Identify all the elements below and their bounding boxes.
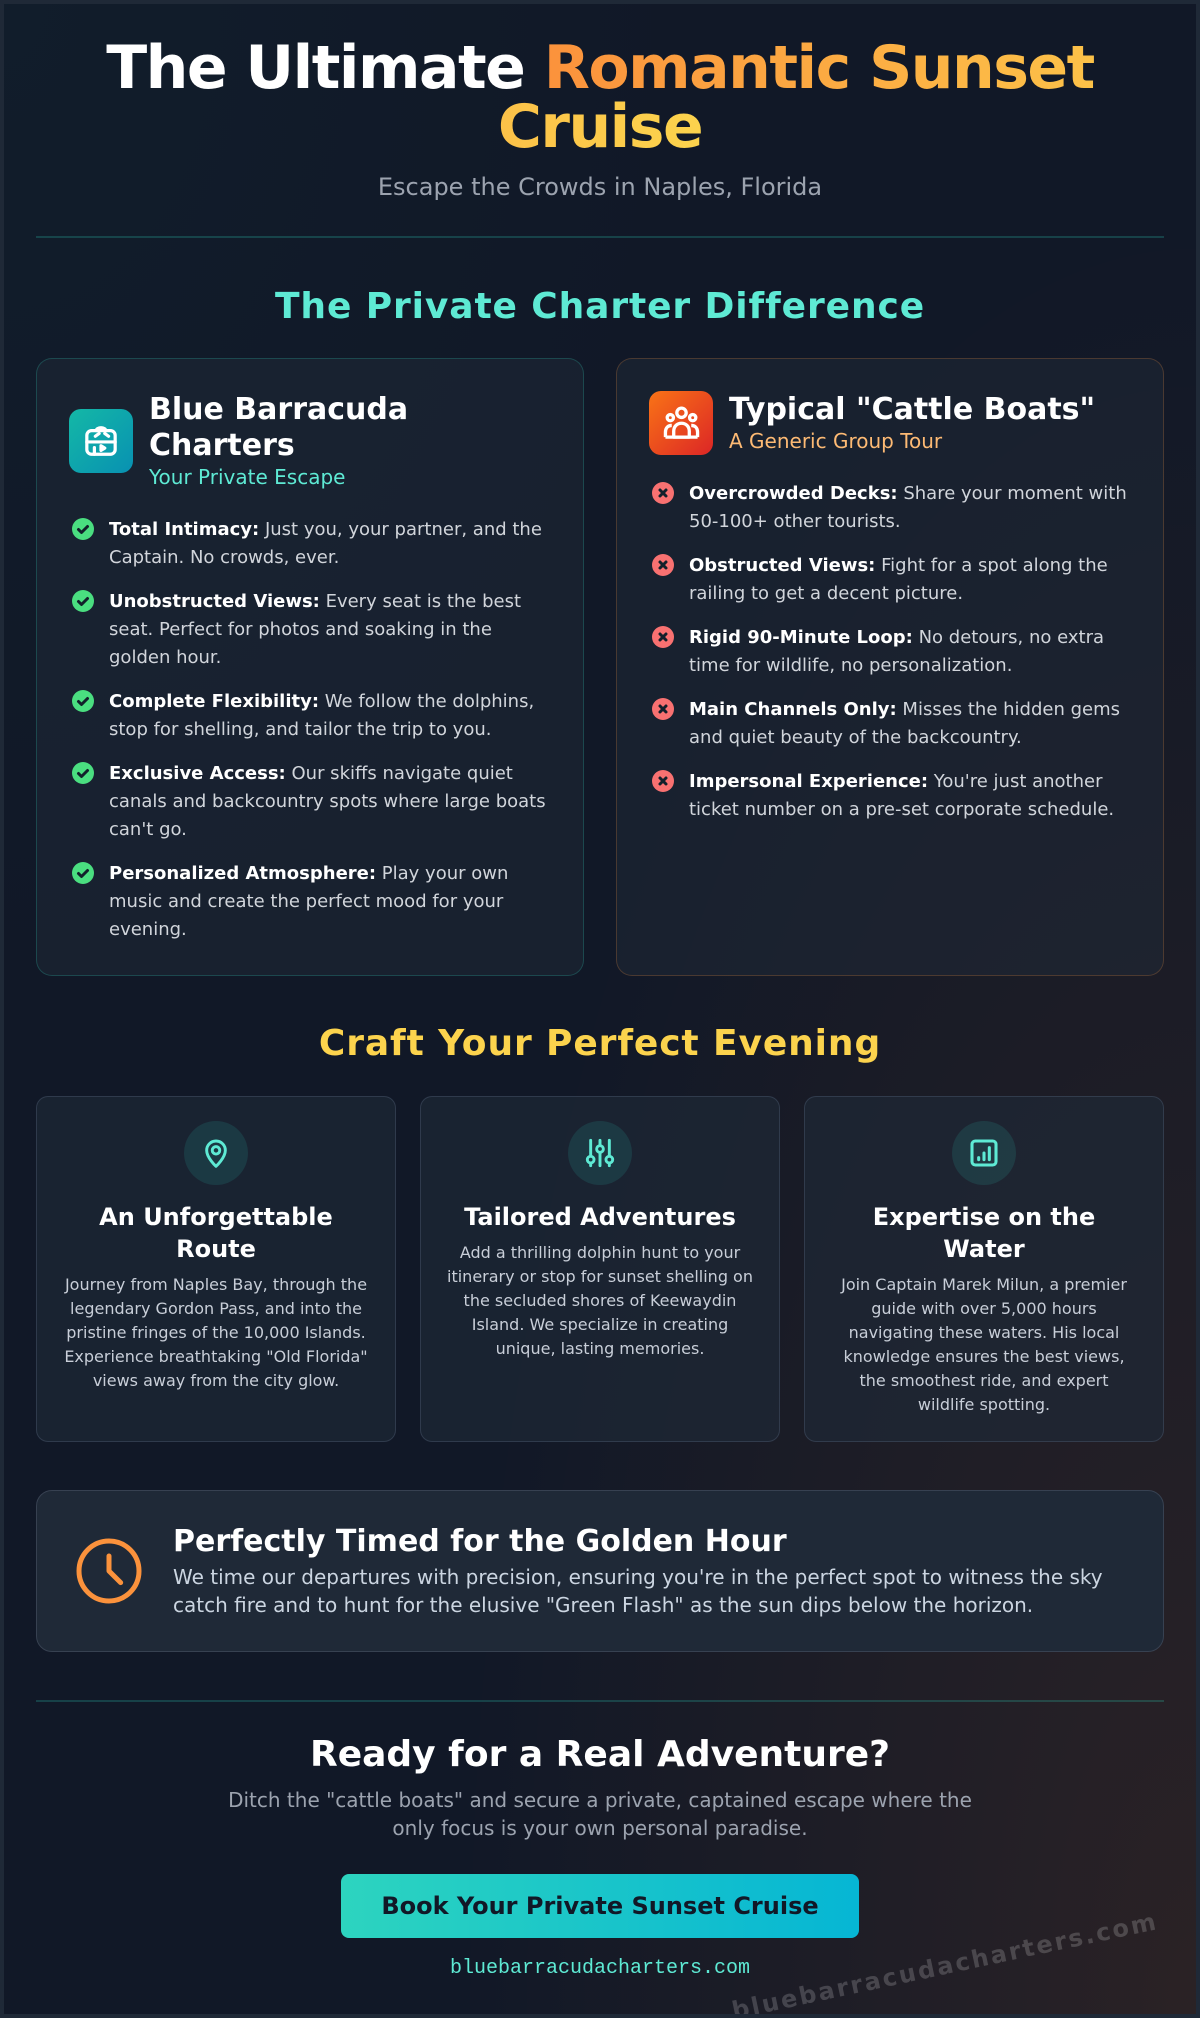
- benefit: total intimacy: [72, 518, 542, 568]
- website url: bluebarracudacharters.com: [450, 1957, 750, 1980]
- panel: typical cattle boats: [616, 358, 1164, 976]
- card text: Join Captain Marek Milun, a premier: [841, 1275, 1127, 1294]
- call to action text: Ditch the "cattle boats" and secure a private, captained escape where the: [228, 1788, 972, 1812]
- drawback: main channels only: [652, 698, 1120, 748]
- button: book cruise: Book Your Private Sunset Cruise: [381, 1892, 819, 1920]
- card text: the smoothest ride, and expert: [859, 1371, 1109, 1390]
- card heading: Tailored Adventures: [464, 1203, 736, 1231]
- drawback: impersonal experience: [652, 770, 1114, 820]
- card heading: An Unforgettable: [99, 1203, 333, 1231]
- benefit: unobstructed views: Unobstructed Views: Every seat is the best: [109, 591, 521, 612]
- benefit: personalized atmosphere: [72, 862, 508, 940]
- button: book cruise: [341, 1874, 859, 1938]
- card text: itinerary or stop for sunset shelling on: [447, 1267, 753, 1286]
- card text: navigating these waters. His local: [849, 1323, 1119, 1342]
- icon: clock: [76, 1538, 142, 1604]
- benefit: complete flexibility: [72, 690, 534, 740]
- drawback: overcrowded decks: [652, 482, 1127, 532]
- drawback: obstructed views: [652, 554, 1108, 604]
- card text: wildlife spotting.: [918, 1395, 1050, 1414]
- card heading: [873, 1203, 1095, 1263]
- panel title: [729, 392, 1095, 453]
- panel header: [69, 392, 408, 489]
- card heading: Expertise on the: [873, 1203, 1095, 1231]
- title: Cruise: [498, 92, 702, 162]
- benefit: complete flexibility: stop for shelling, and tailor the trip to you.: [109, 719, 491, 740]
- callout text: [173, 1565, 1103, 1617]
- card text: [447, 1243, 753, 1358]
- panel: expertise on the water: [804, 1096, 1164, 1442]
- benefit: total intimacy: Captain. No crowds, ever.: [109, 547, 339, 568]
- panel title: Charters: [149, 428, 295, 463]
- card text: Journey from Naples Bay, through the: [65, 1275, 367, 1294]
- benefit: unobstructed views: golden hour.: [109, 647, 221, 668]
- icon: crowd of people: [649, 391, 713, 455]
- benefit: exclusive access: can't go.: [109, 819, 187, 840]
- panel: golden hour: [36, 1490, 1164, 1652]
- benefit: personalized atmosphere: Personalized Atmosphere: Play your own: [109, 863, 508, 884]
- card text: pristine fringes of the 10,000 Islands.: [66, 1323, 366, 1342]
- panel title: A Generic Group Tour: [729, 429, 942, 453]
- panel title: Typical "Cattle Boats": [729, 392, 1095, 427]
- card text: [64, 1275, 368, 1390]
- benefit: personalized atmosphere: music and create the perfect mood for your: [109, 891, 503, 912]
- panel header: [649, 391, 1095, 455]
- call to action text: only focus is your own personal paradise.: [392, 1816, 808, 1840]
- card heading: [99, 1203, 333, 1263]
- heading: craft your perfect evening: Craft Your Perfect Evening: [319, 1023, 881, 1064]
- drawback: obstructed views: railing to get a decent picture.: [689, 583, 963, 604]
- benefit: exclusive access: [72, 762, 546, 840]
- card text: Island. We specialize in creating: [472, 1315, 728, 1334]
- callout text: catch fire and to hunt for the elusive "Green Flash" as the sun dips below the horizon.: [173, 1593, 1033, 1617]
- benefit: total intimacy: Total Intimacy: Just you, your partner, and the: [109, 519, 542, 540]
- callout text: We time our departures with precision, ensuring you're in the perfect spot to witness the sky: [173, 1565, 1103, 1589]
- heading: call to action: Ready for a Real Adventure?: [310, 1734, 890, 1775]
- panel: tailored adventures: [420, 1096, 780, 1442]
- card text: views away from the city glow.: [93, 1371, 339, 1390]
- drawbacks list: [652, 482, 1127, 820]
- drawback: impersonal experience: Impersonal Experience: You're just another: [689, 771, 1103, 792]
- panel: unforgettable route: [36, 1096, 396, 1442]
- card text: Experience breathtaking "Old Florida": [64, 1347, 368, 1366]
- panel title: [149, 392, 408, 489]
- drawback: overcrowded decks: 50-100+ other tourists.: [689, 511, 901, 532]
- panel: blue barracuda charters: [36, 358, 584, 976]
- call to action text: [228, 1788, 972, 1840]
- title: The Ultimate Romantic Sunset: [106, 32, 1094, 102]
- card text: knowledge ensures the best views,: [843, 1347, 1125, 1366]
- panel title: Blue Barracuda: [149, 392, 408, 427]
- benefit: exclusive access: Exclusive Access: Our skiffs navigate quiet: [109, 763, 513, 784]
- callout heading: Perfectly Timed for the Golden Hour: [173, 1524, 787, 1559]
- drawback: rigid loop: [652, 626, 1104, 676]
- drawback: impersonal experience: ticket number on a pre-set corporate schedule.: [689, 799, 1114, 820]
- card heading: Route: [176, 1235, 256, 1263]
- icon: sliders: [568, 1121, 632, 1185]
- panel title: Your Private Escape: [149, 465, 345, 489]
- card text: Add a thrilling dolphin hunt to your: [460, 1243, 740, 1262]
- benefit: unobstructed views: [72, 590, 521, 668]
- card text: [840, 1275, 1127, 1414]
- card heading: Water: [943, 1235, 1025, 1263]
- heading: private charter difference: The Private Charter Difference: [275, 286, 925, 327]
- title: [106, 32, 1094, 162]
- benefits list: [72, 518, 546, 940]
- drawback: obstructed views: Obstructed Views: Fight for a spot along the: [689, 555, 1108, 576]
- icon: ticket case: [69, 409, 133, 473]
- benefit: exclusive access: canals and backcountry spots where large boats: [109, 791, 546, 812]
- benefit: unobstructed views: seat. Perfect for photos and soaking in the: [109, 619, 492, 640]
- drawback: rigid loop: time for wildlife, no personalization.: [689, 655, 1012, 676]
- drawback: rigid loop: Rigid 90-Minute Loop: No detours, no extra: [689, 627, 1104, 648]
- benefit: personalized atmosphere: evening.: [109, 919, 187, 940]
- card text: guide with over 5,000 hours: [871, 1299, 1097, 1318]
- drawback: main channels only: Main Channels Only: Misses the hidden gems: [689, 699, 1120, 720]
- subtitle: Escape the Crowds in Naples, Florida: [378, 173, 822, 201]
- benefit: complete flexibility: Complete Flexibility: We follow the dolphins,: [109, 691, 534, 712]
- drawback: overcrowded decks: Overcrowded Decks: Share your moment with: [689, 483, 1127, 504]
- icon: chart: [952, 1121, 1016, 1185]
- drawback: main channels only: and quiet beauty of the backcountry.: [689, 727, 1022, 748]
- icon: map pin: [184, 1121, 248, 1185]
- card text: the secluded shores of Keewaydin: [464, 1291, 736, 1310]
- card text: legendary Gordon Pass, and into the: [70, 1299, 362, 1318]
- card text: unique, lasting memories.: [496, 1339, 704, 1358]
